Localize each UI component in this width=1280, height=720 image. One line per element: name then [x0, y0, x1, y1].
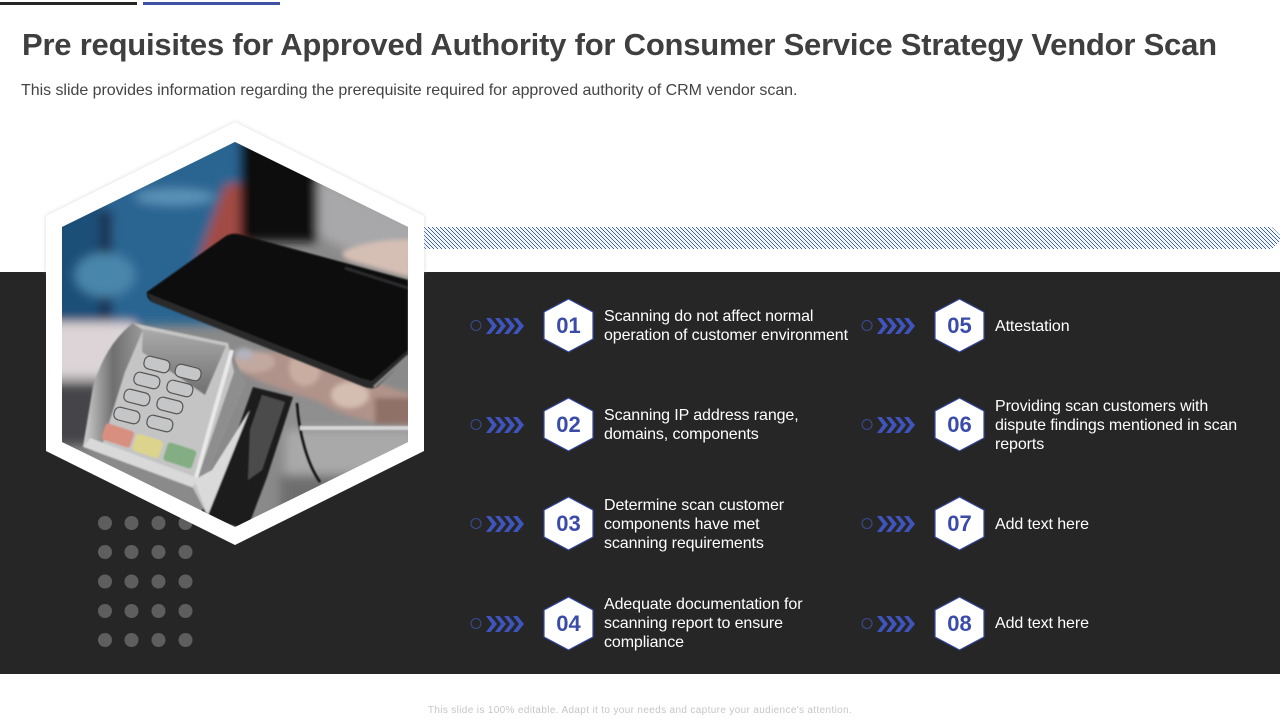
- dark panel: [0, 272, 1280, 674]
- item 08: Add text here: [995, 614, 1089, 632]
- hexagon photo: phone payment at card terminal: [44, 121, 427, 545]
- phone: [147, 234, 408, 388]
- item 02: 02: [556, 412, 581, 437]
- item 07: [862, 496, 1089, 550]
- terminal body: [83, 323, 245, 515]
- item 03: [470, 496, 784, 552]
- item 08: 08: [947, 611, 972, 636]
- dot grid: [98, 516, 192, 647]
- item 04: compliance: [604, 634, 684, 650]
- item 03: components have met: [604, 516, 760, 532]
- title: Pre requisites for Approved Authority for Consumer Service Strategy Vendor Scan: [22, 27, 1217, 62]
- item 04: Adequate documentation for: [604, 596, 802, 612]
- item 08: [862, 596, 1089, 650]
- subtitle: This slide provides information regarding the prerequisite required for approved authority of CRM vendor scan.: [21, 82, 797, 99]
- item 04: 04: [556, 611, 581, 636]
- hatched band: [424, 227, 1280, 249]
- footer note: This slide is 100% editable. Adapt it to your needs and capture your audience's attention.: [428, 705, 852, 716]
- item 03: Determine scan customer: [604, 496, 784, 514]
- stand: [200, 387, 293, 530]
- item 01: Scanning do not affect normal: [604, 308, 813, 325]
- item 02: [470, 398, 799, 452]
- item 03: 03: [556, 511, 581, 536]
- item 05: 05: [947, 313, 972, 338]
- item 03: scanning requirements: [604, 534, 764, 552]
- item 06: dispute findings mentioned in scan: [995, 416, 1237, 434]
- item 06: Providing scan customers with: [995, 398, 1208, 414]
- item 04: [470, 596, 802, 650]
- item 04: scanning report to ensure: [604, 614, 783, 632]
- top accent bars: [0, 2, 280, 5]
- item 06: 06: [947, 412, 972, 437]
- item 06: reports: [995, 436, 1044, 452]
- item 01: [470, 298, 848, 352]
- item 06: [862, 398, 1237, 452]
- item 05: [862, 298, 1070, 352]
- item 01: operation of customer environment: [604, 327, 848, 344]
- item 02: domains, components: [604, 426, 759, 443]
- item 07: Add text here: [995, 516, 1089, 532]
- item 02: Scanning IP address range,: [604, 407, 799, 424]
- item 05: Attestation: [995, 318, 1070, 334]
- item 07: 07: [947, 511, 972, 536]
- item 01: 01: [556, 313, 581, 338]
